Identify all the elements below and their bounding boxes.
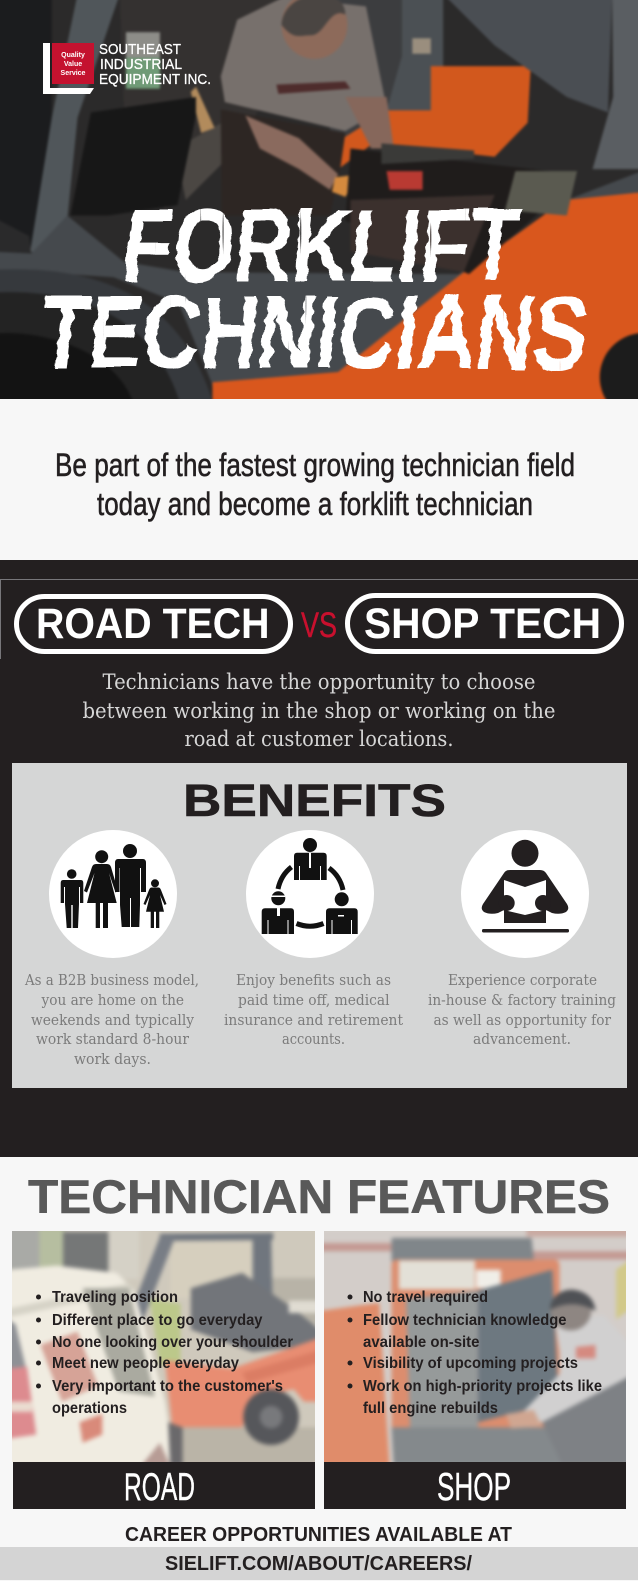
label bar: shop [324, 1462, 626, 1509]
panel: shop photo with feature list [319, 1228, 631, 1465]
text: training benefit: advancement. [473, 1030, 571, 1048]
text: paid time off benefit: paid time off, medical [238, 991, 390, 1009]
text: paid time off benefit: insurance and retirement [224, 1011, 403, 1029]
list: road features: Different place to go everyday [52, 1312, 263, 1329]
title: Forklift Technicians: FORKLIFT [118, 188, 525, 304]
text: b2b business model benefit: you are home on the [41, 991, 184, 1009]
text: technicians choose description [82, 670, 556, 751]
list: shop features: Work on high-priority projects like [363, 1378, 602, 1395]
logo: Southeast Industrial Equipment Inc.: SOUTHEAST [99, 41, 181, 58]
footer bar: careers url: SIELIFT.COM/ABOUT/CAREERS/ [165, 1553, 472, 1575]
logo: Southeast Industrial Equipment Inc.: Value [64, 61, 82, 68]
heading: benefits: BENEFITS [183, 775, 446, 826]
label: vs: VS [301, 606, 337, 645]
logo: Southeast Industrial Equipment Inc. [43, 41, 211, 94]
list: shop features: No travel required [363, 1289, 488, 1306]
list: shop features [348, 1289, 602, 1417]
label bar: road [13, 1462, 315, 1509]
text: b2b business model benefit [24, 971, 199, 1068]
text: paid time off benefit: accounts. [282, 1030, 345, 1048]
icon: person reading [461, 830, 589, 958]
badge: road tech: ROAD TECH [36, 600, 270, 648]
footer bar: careers url [0, 1547, 638, 1580]
list: road features: Meet new people everyday [52, 1355, 239, 1372]
list: road features [36, 1289, 293, 1417]
logo: Southeast Industrial Equipment Inc.: EQUIPMENT INC. [99, 71, 211, 88]
panel: road photo with feature list [7, 1228, 320, 1465]
list: shop features: Fellow technician knowledge [363, 1312, 567, 1329]
panel: dark road vs shop section [0, 560, 638, 1157]
text: technicians choose description: Technicians have the opportunity to choose [102, 670, 536, 694]
text: b2b business model benefit: work days. [74, 1050, 151, 1068]
text: career opportunities: CAREER OPPORTUNITIES AVAILABLE AT [125, 1524, 512, 1546]
logo: Southeast Industrial Equipment Inc.: Quality [61, 52, 85, 59]
list: shop features: available on-site [363, 1334, 480, 1351]
heading: technician features: TECHNICIAN FEATURES [28, 1170, 610, 1223]
list: road features: No one looking over your shoulder [52, 1334, 293, 1351]
intro text [55, 447, 575, 522]
text: technicians choose description: road at customer locations. [184, 727, 454, 751]
text: training benefit: as well as opportunity for [434, 1011, 612, 1029]
text: b2b business model benefit: As a B2B business model, [24, 971, 199, 989]
text: training benefit: Experience corporate [448, 971, 597, 989]
list: shop features: Visibility of upcoming projects [363, 1355, 578, 1372]
text: paid time off benefit: Enjoy benefits such as [236, 971, 391, 989]
text: training benefit: in-house & factory training [428, 991, 616, 1009]
list: shop features: full engine rebuilds [363, 1400, 498, 1417]
list: road features: Traveling position [52, 1289, 178, 1306]
text: training benefit [428, 971, 616, 1048]
icon: team circle [246, 830, 374, 958]
logo: Southeast Industrial Equipment Inc.: INDUSTRIAL [100, 56, 182, 73]
badge: shop tech: SHOP TECH [364, 600, 601, 648]
text: b2b business model benefit: work standard 8-hour [36, 1030, 190, 1048]
text: technicians choose description: between working in the shop or working on the [82, 699, 556, 723]
list: road features: Very important to the customer's [52, 1378, 283, 1395]
text: b2b business model benefit: weekends and typically [31, 1011, 194, 1029]
panel: hero photo of technician working on forklift [0, 0, 638, 399]
title: Forklift Technicians [35, 188, 594, 391]
panel: benefits [12, 763, 627, 1088]
logo: Southeast Industrial Equipment Inc.: Service [61, 70, 86, 77]
icon: family [49, 830, 177, 958]
label bar: road: ROAD [124, 1466, 195, 1509]
intro text: today and become a forklift technician [97, 486, 533, 522]
text: paid time off benefit [224, 971, 403, 1048]
label bar: shop: SHOP [437, 1466, 511, 1509]
list: road features: operations [52, 1400, 127, 1417]
